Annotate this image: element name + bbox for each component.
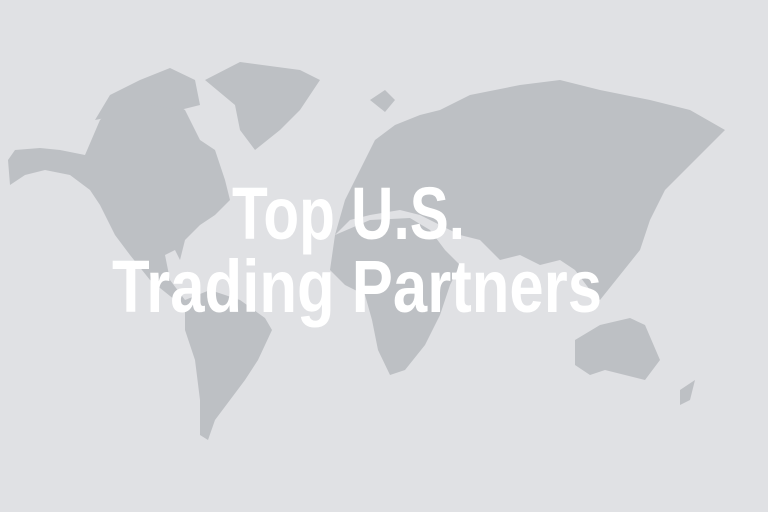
australia: [575, 318, 660, 380]
greenland: [205, 62, 320, 150]
europe and asia: [335, 80, 725, 300]
north america: [8, 95, 230, 310]
title: [112, 172, 602, 328]
title: Top U.S.: [232, 172, 465, 255]
title: Trading Partners: [112, 245, 602, 328]
africa: [330, 218, 460, 375]
south america: [185, 290, 272, 440]
world map: [8, 62, 725, 440]
